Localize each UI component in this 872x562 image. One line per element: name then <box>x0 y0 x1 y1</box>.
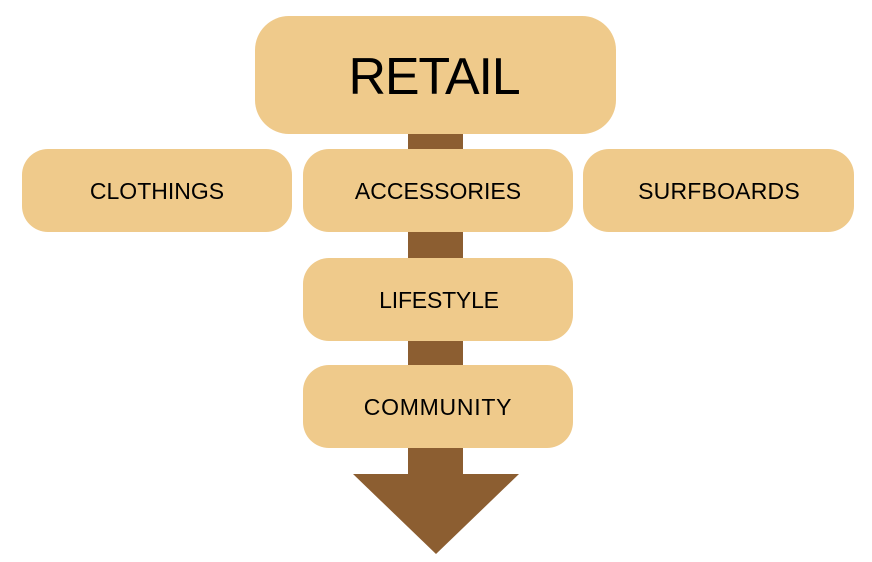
box: retail <box>255 16 616 134</box>
box: lifestyle <box>303 258 573 341</box>
box: clothings: CLOTHINGS <box>90 178 224 204</box>
box: surfboards <box>583 149 854 232</box>
box: accessories <box>303 149 573 232</box>
box: clothings <box>22 149 292 232</box>
arrow: flow downward <box>353 134 519 554</box>
box: retail: RETAIL <box>348 48 520 106</box>
box: community <box>303 365 573 448</box>
box: accessories: ACCESSORIES <box>355 178 521 204</box>
box: community: COMMUNITY <box>364 394 512 420</box>
box: surfboards: SURFBOARDS <box>638 178 800 204</box>
box: lifestyle: LIFESTYLE <box>379 287 499 313</box>
